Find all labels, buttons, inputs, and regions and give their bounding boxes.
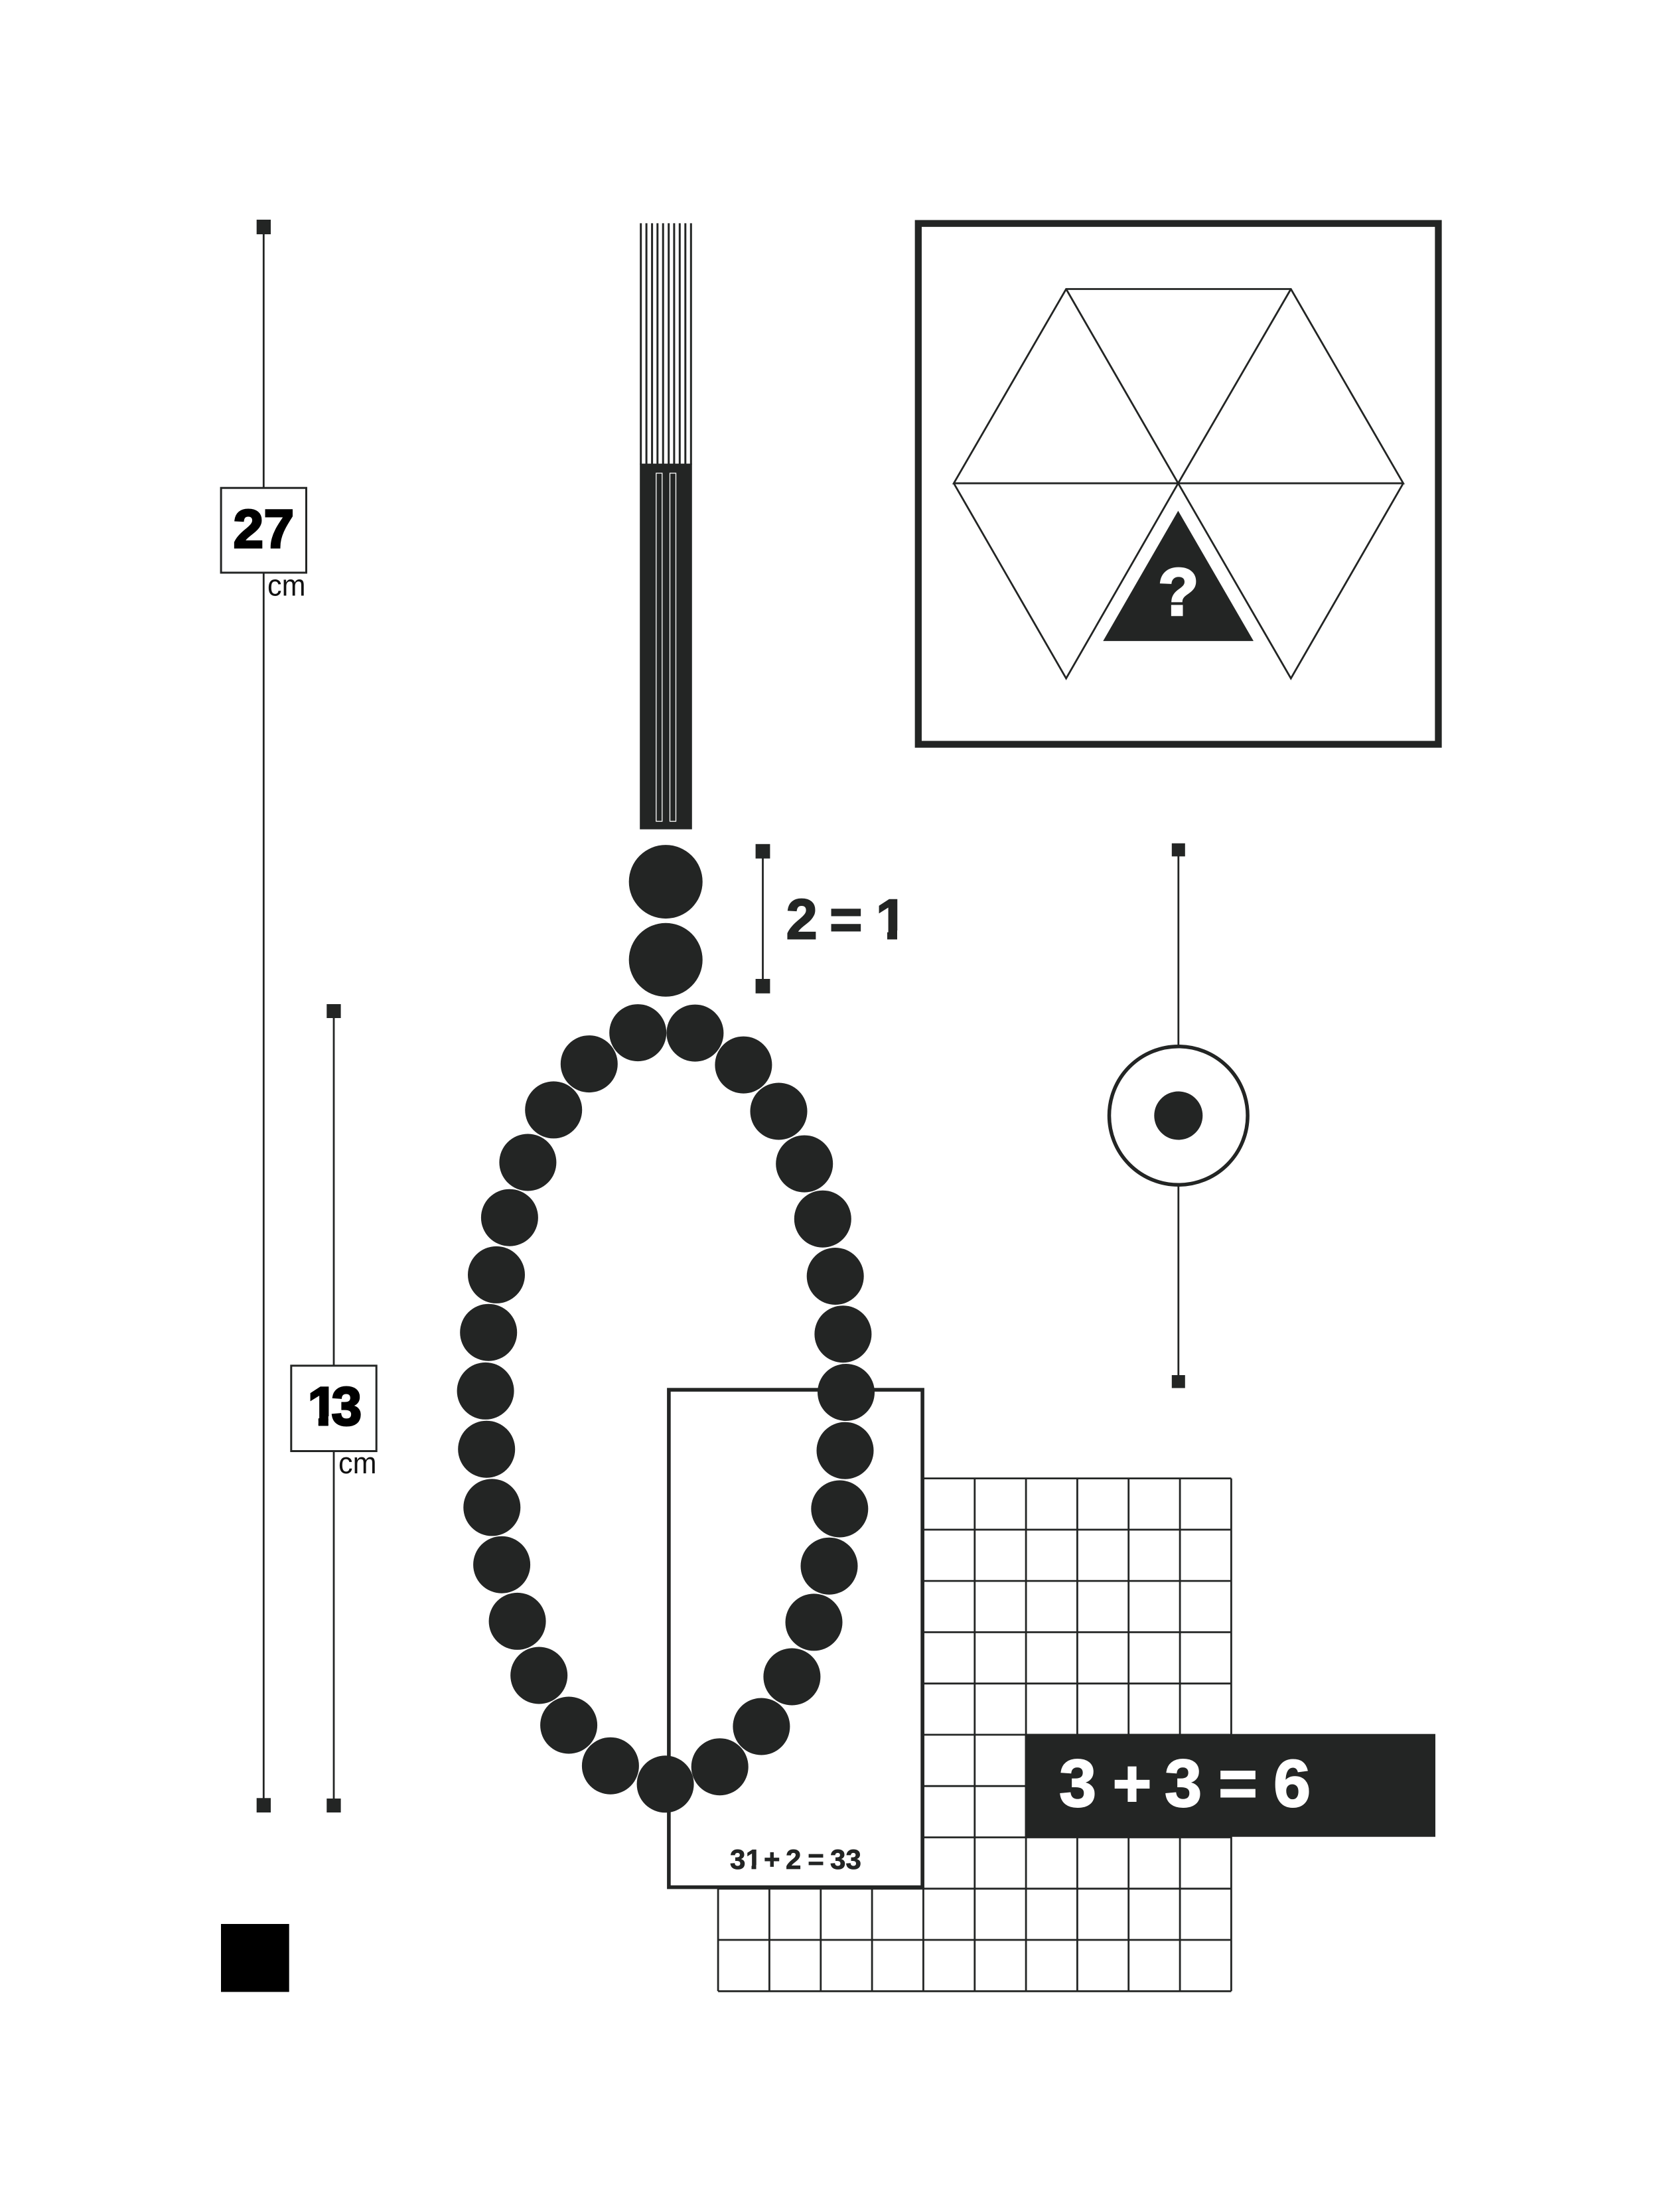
panel: hexagon puzzle <box>918 224 1439 745</box>
label box: 13 <box>291 1366 376 1451</box>
ruler: 2 = 1 bracket <box>756 844 770 994</box>
tassel <box>640 223 692 830</box>
black square <box>221 1924 289 1992</box>
hexagon of triangles with the bottom triangle open <box>954 289 1404 678</box>
equation: 2 = 1: 2 = 1 <box>786 888 907 951</box>
panel: 3 + 3 = 6: 3 + 3 = 6 <box>1059 1747 1311 1821</box>
target on vertical line <box>1110 844 1248 1388</box>
label box: 13: 3 <box>332 1376 362 1437</box>
ruler: 13 cm <box>291 1004 377 1812</box>
panel: 31 + 2 = 33 <box>669 1390 922 1887</box>
panel: 3 + 3 = 6 <box>1025 1734 1435 1837</box>
black triangle with question mark <box>1103 511 1254 641</box>
label box: 27: 27 <box>234 499 294 559</box>
panel: 31 + 2 = 33: 31 + 2 = 33 <box>730 1844 861 1875</box>
unit: cm: cm <box>267 569 305 603</box>
grid <box>718 1479 1231 1991</box>
unit: cm: cm <box>338 1446 377 1480</box>
black triangle with question mark: ? <box>1158 555 1198 629</box>
label box: 13: 1 <box>308 1376 338 1437</box>
bead necklace <box>457 845 875 1812</box>
ruler: 27 cm <box>221 220 307 1812</box>
label box: 27 <box>221 488 307 573</box>
